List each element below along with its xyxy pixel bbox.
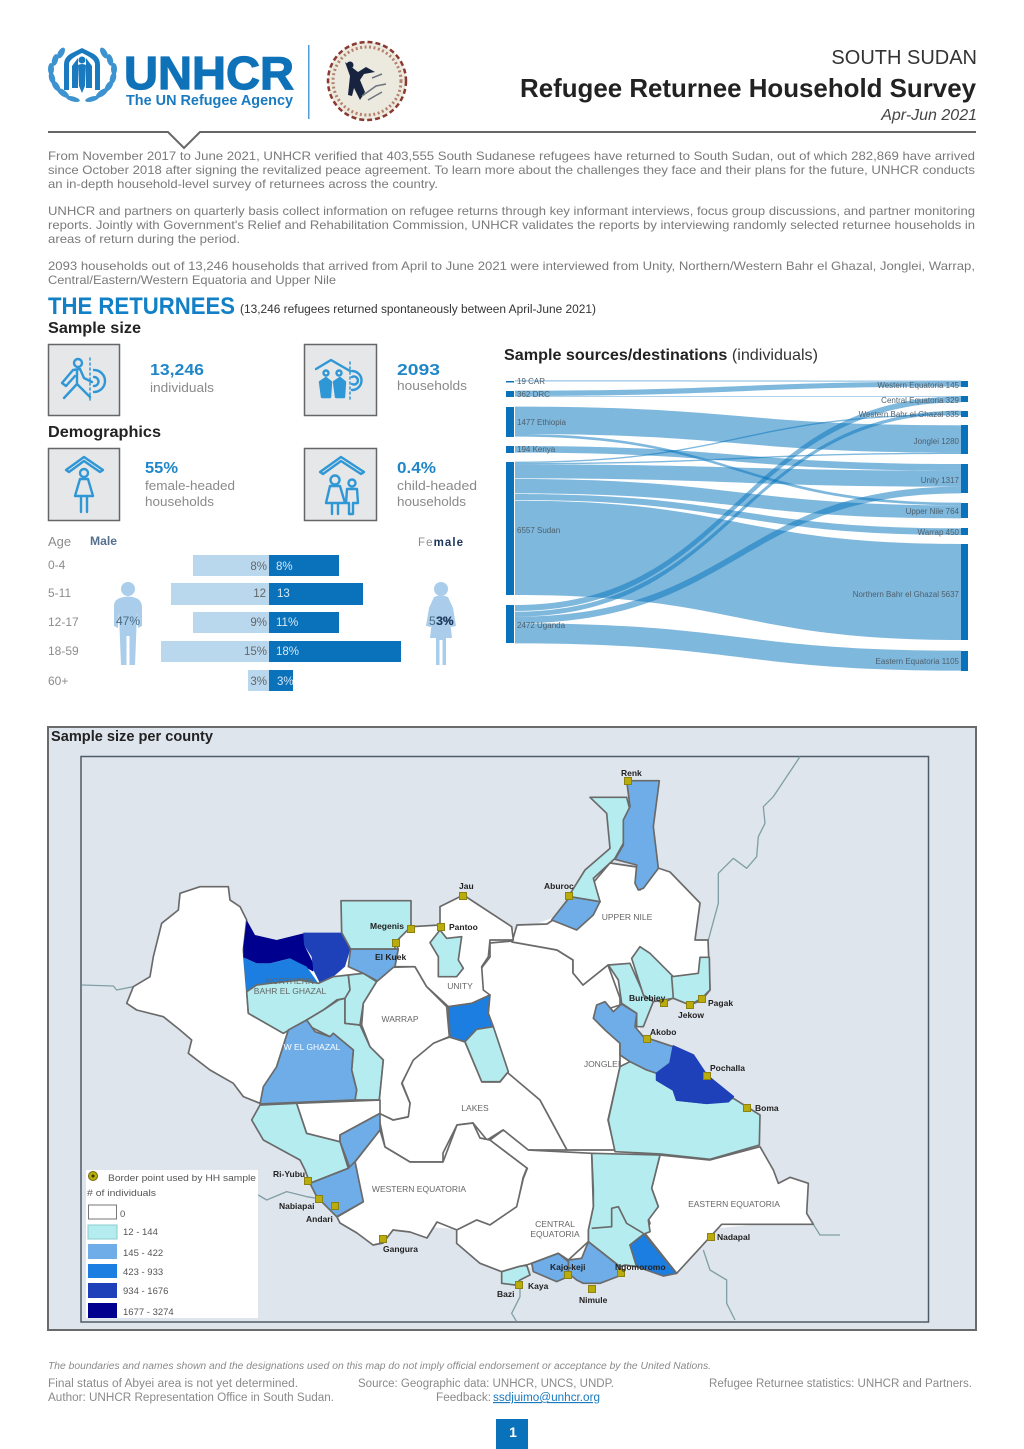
age labels: 60+ [48,674,68,688]
sankey source labels: 194 Kenya [517,445,556,454]
age labels: 0-4 [48,558,66,572]
footer credits: Refugee Returnee statistics: UNHCR and Partners. [709,1378,972,1390]
sankey destination labels: Unity 1317 [921,476,960,485]
map: state labels: BAHR EL GHAZAL [254,986,326,996]
male bars [161,555,269,691]
footer disclaimer: The boundaries and names shown and the designations used on this map do not imply official endorsement or acceptance by the United Nations. [48,1361,711,1372]
age labels [48,558,79,688]
female values: 8% [276,561,293,573]
map legend: 423 - 933 [123,1267,163,1278]
sankey source labels: 362 DRC [517,390,550,399]
stat: child-headed households [304,448,477,520]
sankey source labels: 2472 Uganda [517,621,566,630]
page number [496,1419,528,1449]
map: state labels: LAKES [461,1103,489,1113]
male values: 15% [244,646,267,658]
map: border point labels: Nabiapai [279,1201,314,1211]
map: border point labels: Kajo-keji [550,1262,585,1272]
icon: person returning [62,358,105,400]
stat: female-headed households [48,448,235,520]
map: border point labels: Kaya [528,1281,549,1291]
stat: individuals [48,344,215,416]
map: state labels: EASTERN EQUATORIA [688,1199,780,1209]
icon: male figure: 47% [116,614,140,628]
map: border point labels: Megenis [370,921,404,931]
map: border point labels: Aburoc [544,881,574,891]
stat: households: 2093 [397,362,440,379]
female values: 11% [276,617,298,629]
age pyramid chart [48,534,463,691]
map: border point labels: Pochalla [710,1063,745,1073]
map: state labels [254,912,780,1239]
header rule with notch [48,132,976,148]
map: white counties in page coordinates [337,863,710,1245]
intro text: UNHCR and partners on quarterly basis collect information on refugee returns through key informant interviews, focus group discussions, and partner monitoring [48,204,975,218]
sankey source labels: 6557 Sudan [517,526,560,535]
stat: child-headed households: households [397,494,467,509]
icon: female figure: 3% [436,614,454,628]
icon: woman under roof [66,457,103,512]
male values: 3% [250,676,267,688]
map: state labels: UPPER NILE [602,912,653,922]
column headers: Female [418,537,463,549]
icon: UNHCR emblem [48,46,117,103]
sankey destination nodes [961,381,968,671]
sankey source nodes [506,381,514,643]
column headers: Age [48,534,71,549]
survey title: Refugee Returnee Household Survey [520,73,977,103]
page number: 1 [509,1424,517,1440]
map legend: 934 - 1676 [123,1286,168,1297]
intro text: reports. Jointly with Government's Relief and Rehabilitation Commission, UNHCR validates the reports by interviewing randomly selected returnee households in [48,218,975,232]
map: southwest counties [252,1100,380,1217]
map: southern counties [457,1130,813,1285]
map: border point labels: Ri-Yubu [273,1169,305,1179]
map: border point labels: Gangura [383,1244,418,1254]
stat: female-headed households: 55% [145,460,178,477]
sankey destination labels: Western Bahr el Ghazal 335 [859,410,960,419]
map: state labels: NORTHERN [266,976,314,986]
map: border point labels: Andari [306,1214,333,1224]
map: border point markers [304,778,750,1292]
map: state labels: WARRAP [382,1014,419,1024]
map: country base [250,900,800,1270]
map: northeast counties [552,781,760,1159]
intro text: Central/Eastern/Western Equatoria and Upper Nile [48,273,336,287]
footer credits [48,1378,972,1404]
sankey destination labels: Western Equatoria 145 [877,381,960,390]
stat: individuals: 13,246 [150,362,204,379]
map legend: 1677 - 3274 [123,1307,174,1318]
stat: individuals: individuals [150,380,215,395]
sankey source labels: 1477 Ethiopia [517,418,566,427]
column headers: Male [90,536,117,548]
sankey destination labels: Eastern Equatoria 1105 [876,657,960,666]
sankey destination labels: Warrap 450 [918,528,960,537]
map frame [81,756,928,1322]
panel: sample size per county map [48,727,976,1330]
country: SOUTH SUDAN [831,47,977,69]
sankey destination labels: Upper Nile 764 [906,507,960,516]
female values: 13 [277,588,290,600]
map rivers and international borders [82,757,840,1322]
icon: children under roof [320,457,364,514]
period: Apr-Jun 2021 [880,107,977,124]
sankey destination labels: Northern Bahr el Ghazal 5637 [853,590,960,599]
intro text: 2093 households out of 13,246 households that arrived from April to June 2021 were interviewed from Unity, Northern/Western Bahr el Ghazal, Jonglei, Warrap, [48,259,975,273]
map: border point labels: Renk [621,768,642,778]
stat: female-headed households: female-headed [145,478,235,493]
age labels: 18-59 [48,644,79,658]
map legend: 145 - 422 [123,1248,163,1259]
map: border point labels: Boma [755,1103,779,1113]
footer credits: Feedback: [436,1392,491,1404]
sankey source labels [517,377,566,630]
male values: 12 [253,588,266,600]
icon: female figure: 53% [429,614,453,628]
intro text: areas of return during the period. [48,232,240,246]
sankey source labels: 19 CAR [517,377,545,386]
intro text: an in-depth household-level survey of returnees across the country. [48,177,438,191]
age labels: 12-17 [48,615,79,629]
header title block [520,47,977,124]
map: border point labels: Bazi [497,1289,514,1299]
tagline: The UN Refugee Agency [126,93,293,109]
sankey chart [506,377,968,671]
stat: female-headed households: households [145,494,215,509]
footer credits: Author: UNHCR Representation Office in South Sudan. [48,1392,334,1404]
sankey destination labels [853,381,960,666]
male values: 8% [250,561,267,573]
map: border point labels [273,768,779,1305]
map legend [86,1170,258,1318]
map: state labels: JONGLEI [584,1059,620,1069]
intro text: From November 2017 to June 2021, UNHCR verified that 403,555 South Sudanese refugees have returned to South Sudan, out of which 282,869 have arrived [48,149,975,163]
heading: demographics: Demographics [48,424,161,441]
stat: child-headed households: child-headed [397,478,477,493]
map: border point labels: Nadapal [717,1232,750,1242]
map: border point labels: Jekow [678,1010,704,1020]
map: northwest counties [127,887,513,1120]
stat: child-headed households: 0.4% [397,460,436,477]
heading: sample sources/destinations: Sample sources/destinations (individuals) [504,347,818,364]
partner seal [328,42,406,120]
map: border point labels: Pagak [708,998,733,1008]
map legend: 12 - 144 [123,1227,158,1238]
stat: households: households [397,378,468,393]
section heading: the returnees [48,293,596,320]
section heading: the returnees: THE RETURNEES [48,293,235,320]
age labels: 5-11 [48,586,71,600]
female values [276,561,299,688]
heading: sample size: Sample size [48,320,141,337]
map: border point labels: Akobo [650,1027,676,1037]
map: state labels: W EL GHAZAL [284,1042,341,1052]
male values [244,561,267,688]
footer credits: ssdjuimo@unhcr.org [493,1392,600,1404]
icon: male figure [114,582,142,665]
map title: Sample size per county [51,729,213,745]
footer credits: Source: Geographic data: UNHCR, UNCS, UNDP. [358,1378,614,1390]
map legend: 0 [120,1209,125,1220]
icon: female figure [426,582,456,665]
map: state labels: CENTRAL [535,1219,575,1229]
map: border point labels: El Kuek [375,952,406,962]
icon: family returning [316,360,362,400]
sankey flows [515,380,961,671]
map: border point labels: Ngomoromo [615,1262,666,1272]
logo: UNHCR [48,46,294,109]
sankey destination labels: Jonglei 1280 [914,437,960,446]
map legend: # of individuals [87,1188,156,1199]
map: border point labels: Burebiey [629,993,666,1003]
female values: 18% [276,646,299,658]
map: border point labels: Jau [459,881,474,891]
column headers [48,534,463,549]
footer credits: Final status of Abyei area is not yet determined. [48,1378,298,1390]
map legend: Border point used by HH sample [108,1173,256,1184]
intro text: since October 2018 after signing the revitalized peace agreement. To learn more about the challenges they face and their plans for the future, UNHCR conducts [48,163,975,177]
female values: 3% [277,676,294,688]
section heading: the returnees: (13,246 refugees returned spontaneously between April-June 2021) [240,304,596,316]
map: border point labels: Pantoo [449,922,478,932]
stat: households [304,344,468,416]
map: state labels: WESTERN EQUATORIA [372,1184,466,1194]
intro text [48,149,975,287]
map: border point labels: Nimule [579,1295,608,1305]
map: state labels: EQUATORIA [530,1229,580,1239]
UNHCR wordmark: UNHCR [124,47,294,99]
sankey destination labels: Central Equatoria 329 [881,396,960,405]
vertical divider [308,45,310,119]
male values: 9% [250,617,267,629]
map: state labels: UNITY [447,981,473,991]
female bars [269,555,401,691]
